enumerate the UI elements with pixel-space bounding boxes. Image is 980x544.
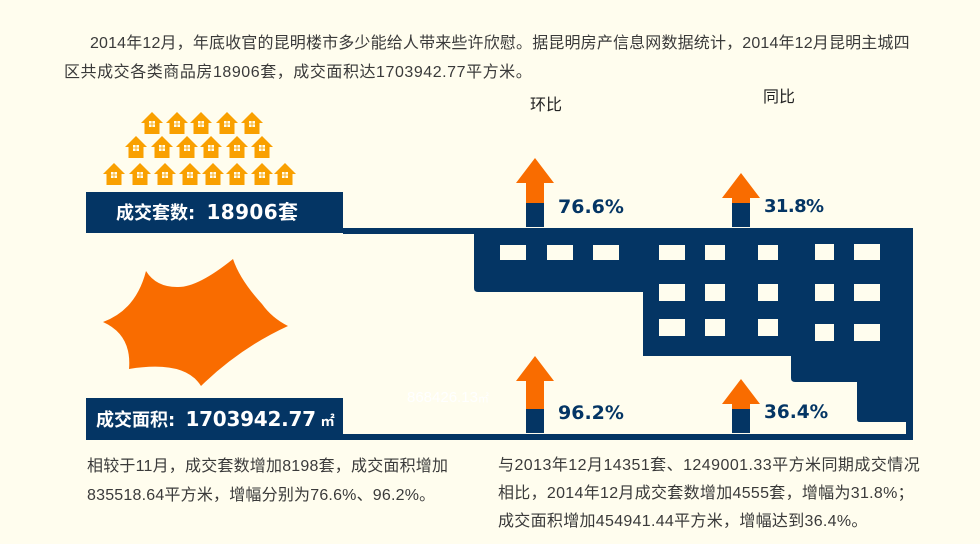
stat: units total: 成交套数: 18906套 (116, 200, 298, 224)
label: month on month: 环比 (530, 97, 562, 114)
stat: area total: 成交面积: 1703942.77 ㎡ (96, 407, 335, 431)
area bar (86, 398, 343, 439)
intro paragraph: 2014年12月，年底收官的昆明楼市多少能给人带来些许欣慰。据昆明房产信息网数据统计，2014年12月昆明主城四 (90, 35, 910, 52)
right note: 成交面积增加454941.44平方米，增幅达到36.4%。 (498, 513, 868, 530)
value 36.4%: 36.4% (764, 402, 828, 423)
right note: 与2013年12月14351套、1249001.33平方米同期成交情况 (498, 457, 920, 474)
arrow: units month on month (516, 158, 554, 227)
arrow: area year on year (722, 379, 760, 433)
left note: 835518.64平方米，增幅分别为76.6%、96.2%。 (87, 487, 435, 504)
intro paragraph (64, 34, 910, 81)
arrow: units year on year (722, 173, 760, 227)
houses icon group (103, 112, 296, 185)
value 31.8%: 31.8% (764, 196, 823, 217)
label: year on year: 同比 (763, 89, 795, 106)
right note: 相比，2014年12月成交套数增加4555套，增幅为31.8%； (498, 485, 914, 502)
building silhouette with base line (86, 192, 913, 440)
value 76.6%: 76.6% (558, 196, 624, 218)
left note (87, 457, 448, 504)
right note (498, 456, 920, 530)
faint area comparison figure: 868426.13㎡ (407, 389, 489, 406)
intro paragraph: 区共成交各类商品房18906套，成交面积达1703942.77平方米。 (64, 64, 532, 81)
arrow: area month on month (516, 356, 554, 433)
left note: 相较于11月，成交套数增加8198套，成交面积增加 (87, 458, 448, 475)
orange area burst shape (103, 259, 288, 386)
value 96.2%: 96.2% (558, 402, 624, 424)
